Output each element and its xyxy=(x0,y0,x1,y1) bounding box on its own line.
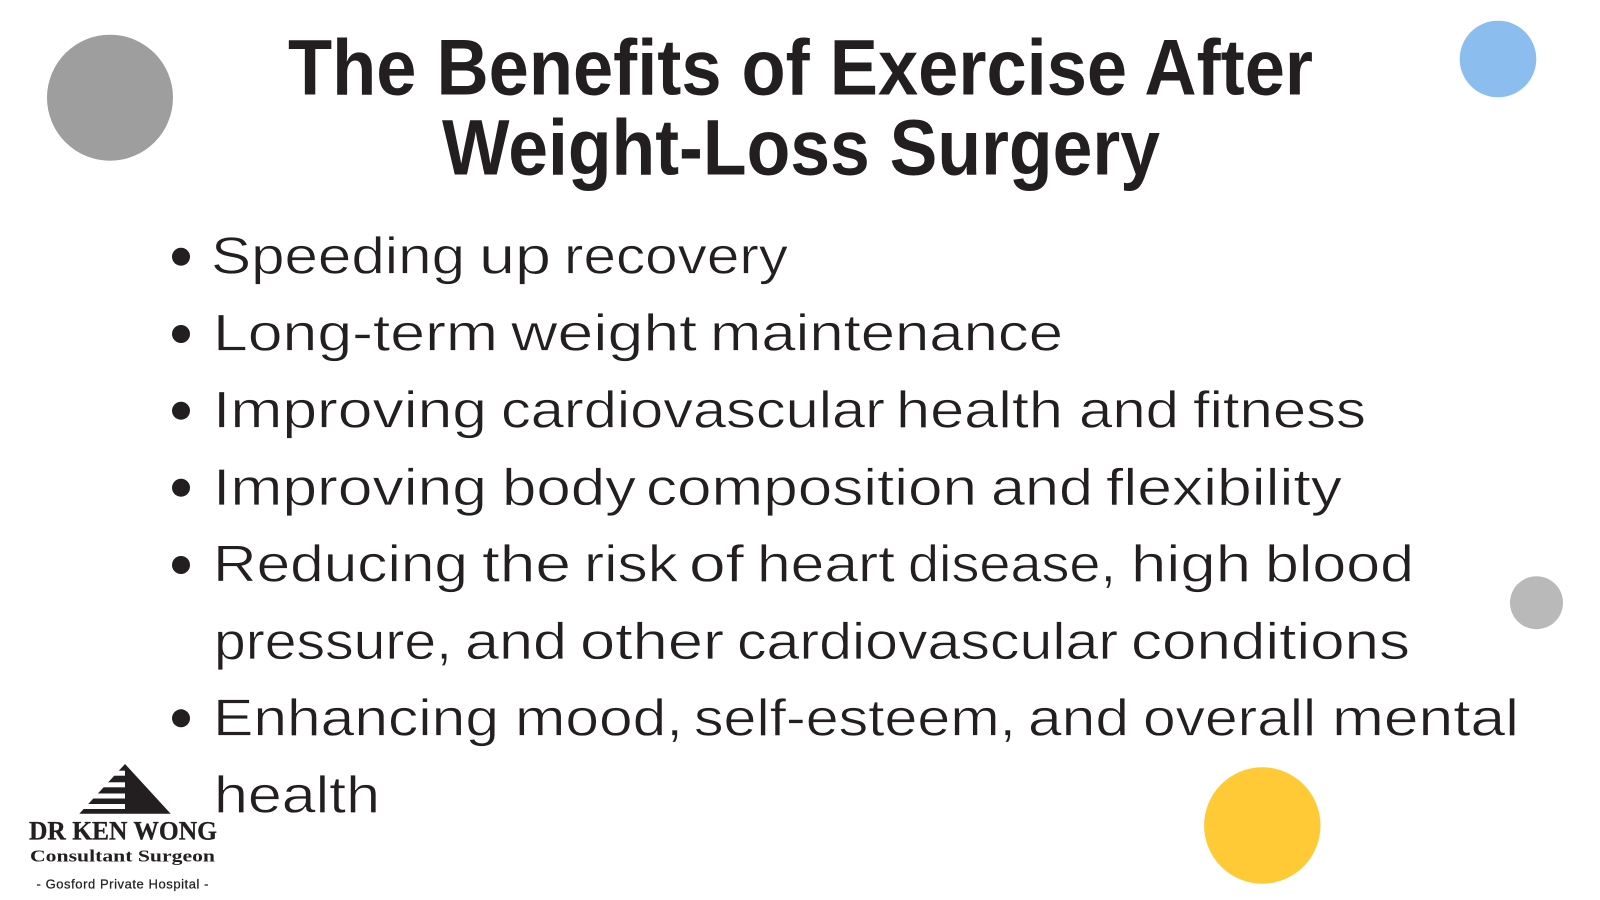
circle: small grey xyxy=(1510,576,1563,629)
bullet: body composition: Improving xyxy=(213,459,487,517)
logo hospital: - Gosford Private Hospital - xyxy=(36,876,208,891)
bullet: cardiovascular health: health xyxy=(896,382,1063,440)
bullet: mood and mental health: health xyxy=(214,767,380,825)
bullet: speeding up recovery: recovery xyxy=(564,228,788,286)
bullet list of benefits xyxy=(172,228,1519,825)
bullet: body composition: and xyxy=(991,459,1093,517)
bullet: reducing risk: conditions xyxy=(1131,613,1410,671)
bullet: cardiovascular health: cardiovascular xyxy=(501,382,885,440)
bullet: speeding up recovery: Speeding xyxy=(211,228,465,286)
bullet: weight maintenance: weight xyxy=(510,305,698,363)
bullet: reducing risk: heart xyxy=(757,536,896,594)
bullet: speeding up recovery: up xyxy=(479,228,551,286)
title xyxy=(288,22,1313,192)
bullet: reducing risk: the xyxy=(482,536,571,594)
bullet: weight maintenance xyxy=(172,305,1063,363)
bullet: weight maintenance: maintenance xyxy=(710,305,1063,363)
bullet: cardiovascular health: fitness xyxy=(1193,382,1366,440)
bullet: reducing risk: and xyxy=(465,613,567,671)
circle: blue xyxy=(1460,21,1536,97)
bullet: reducing risk: of xyxy=(689,536,745,594)
bullet: speeding up recovery xyxy=(172,228,788,286)
bullet: reducing risk: high xyxy=(1131,536,1251,594)
bullet: reducing risk: cardiovascular xyxy=(737,613,1118,671)
bullet: body composition: flexibility xyxy=(1106,459,1342,517)
bullet: cardiovascular health: Improving xyxy=(213,382,487,440)
bullet: mood and mental health: and xyxy=(1028,690,1129,748)
logo role: Consultant Surgeon xyxy=(30,846,216,865)
bullet: weight maintenance: Long-term xyxy=(213,305,498,363)
bullet: body composition: composition xyxy=(646,459,977,517)
logo: Dr Ken Wong xyxy=(29,764,217,891)
bullet: mood and mental health: self-esteem, xyxy=(694,690,1016,748)
bullet: mood and mental health: mental xyxy=(1332,690,1519,748)
bullet: mood and mental health: mood, xyxy=(515,690,683,748)
bullet: mood and mental health: Enhancing xyxy=(213,690,499,748)
circle: yellow xyxy=(1204,767,1321,884)
bullet: cardiovascular health xyxy=(172,382,1366,440)
icon: striped pyramid xyxy=(76,764,171,814)
bullet: body composition: body xyxy=(502,459,636,517)
bullet: reducing risk: blood xyxy=(1265,536,1414,594)
circle: large grey xyxy=(47,35,173,161)
bullet: reducing risk: Reducing xyxy=(213,536,468,594)
logo name: DR KEN WONG xyxy=(29,816,217,845)
bullet: reducing risk: disease, xyxy=(908,536,1116,594)
bullet: reducing risk xyxy=(172,536,1414,671)
bullet: cardiovascular health: and xyxy=(1079,382,1179,440)
bullet: reducing risk: pressure, xyxy=(214,613,452,671)
bullet: mood and mental health: overall xyxy=(1143,690,1316,748)
title: The Benefits of Exercise After xyxy=(288,22,1313,112)
bullet: mood and mental health xyxy=(172,690,1519,825)
bullet: reducing risk: other xyxy=(580,613,724,671)
bullet: body composition xyxy=(172,459,1342,517)
title: Weight-Loss Surgery xyxy=(442,102,1160,192)
bullet: reducing risk: risk xyxy=(584,536,679,594)
